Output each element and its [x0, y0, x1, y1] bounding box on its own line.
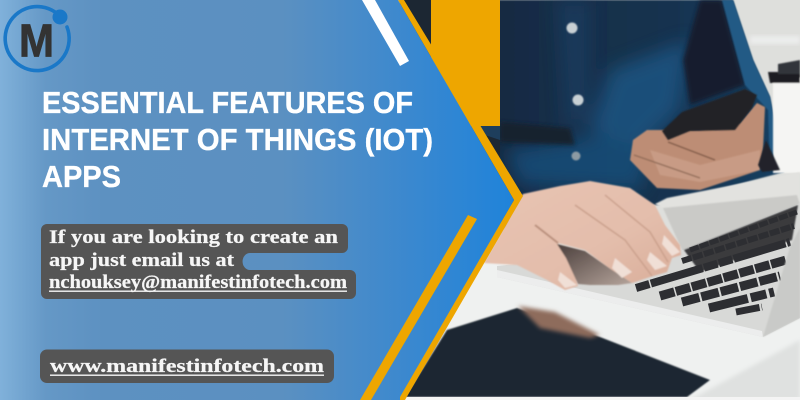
logo ring: [5, 7, 69, 71]
website text: www.manifestinfotech.com: [50, 356, 324, 377]
title: INTERNET OF THINGS (IOT): [42, 122, 433, 157]
laptop lid: [655, 172, 800, 252]
logo letter: M: [19, 14, 54, 66]
laptop front edge: [497, 270, 763, 337]
keyboard: [636, 212, 797, 312]
logo dot: [52, 10, 68, 24]
laptop right lid edge: [763, 228, 800, 337]
sleeve dark inner: [683, 0, 745, 105]
white bottom strip: [400, 397, 800, 400]
wall shelf highlight: [750, 36, 800, 44]
laptop base: [497, 203, 800, 337]
orange chevron border: [396, 0, 523, 400]
desk: [400, 262, 800, 400]
email callout background: [41, 224, 356, 299]
sleeve blue edge: [722, 0, 784, 172]
coffee cup: [768, 60, 800, 173]
email callout: nchouksey@manifestinfotech.com: [49, 272, 347, 293]
orange diagonal stripe: [360, 215, 477, 400]
desk shaded right: [690, 340, 800, 400]
website callout background: [40, 350, 334, 383]
shirt dark band: [500, 122, 575, 145]
left dark zone: [400, 0, 500, 200]
hand on keyboard: [484, 181, 681, 290]
title: [42, 85, 433, 194]
website underline: [50, 374, 324, 376]
finger creases: [575, 205, 652, 276]
gap under palm: [557, 244, 632, 285]
title: ESSENTIAL FEATURES OF: [42, 85, 413, 120]
email callout: [41, 224, 356, 299]
photo: man using phone and laptop: [400, 0, 800, 400]
watch strap: [758, 140, 780, 172]
logo: [5, 7, 69, 71]
email underline: [49, 290, 347, 292]
email callout text: If you are looking to create an: [49, 227, 339, 248]
website callout: [40, 350, 334, 383]
email callout: app just email us at: [49, 250, 235, 271]
orange rectangle accent: [431, 0, 500, 126]
shirt light folds: [505, 0, 690, 190]
dark reflection under the desk: [405, 308, 710, 397]
keyboard dark well: [684, 205, 798, 272]
white diagonal stripe: [362, 0, 409, 66]
shirt: [400, 0, 784, 230]
photo backdrop wall: [400, 0, 800, 400]
fingernails: [662, 235, 680, 256]
hand reflection: [518, 306, 600, 338]
phone: [662, 89, 757, 140]
hand holding phone: [630, 103, 765, 190]
shirt buttons: [566, 22, 584, 160]
blue gradient panel: [0, 0, 514, 400]
title: APPS: [42, 159, 121, 194]
